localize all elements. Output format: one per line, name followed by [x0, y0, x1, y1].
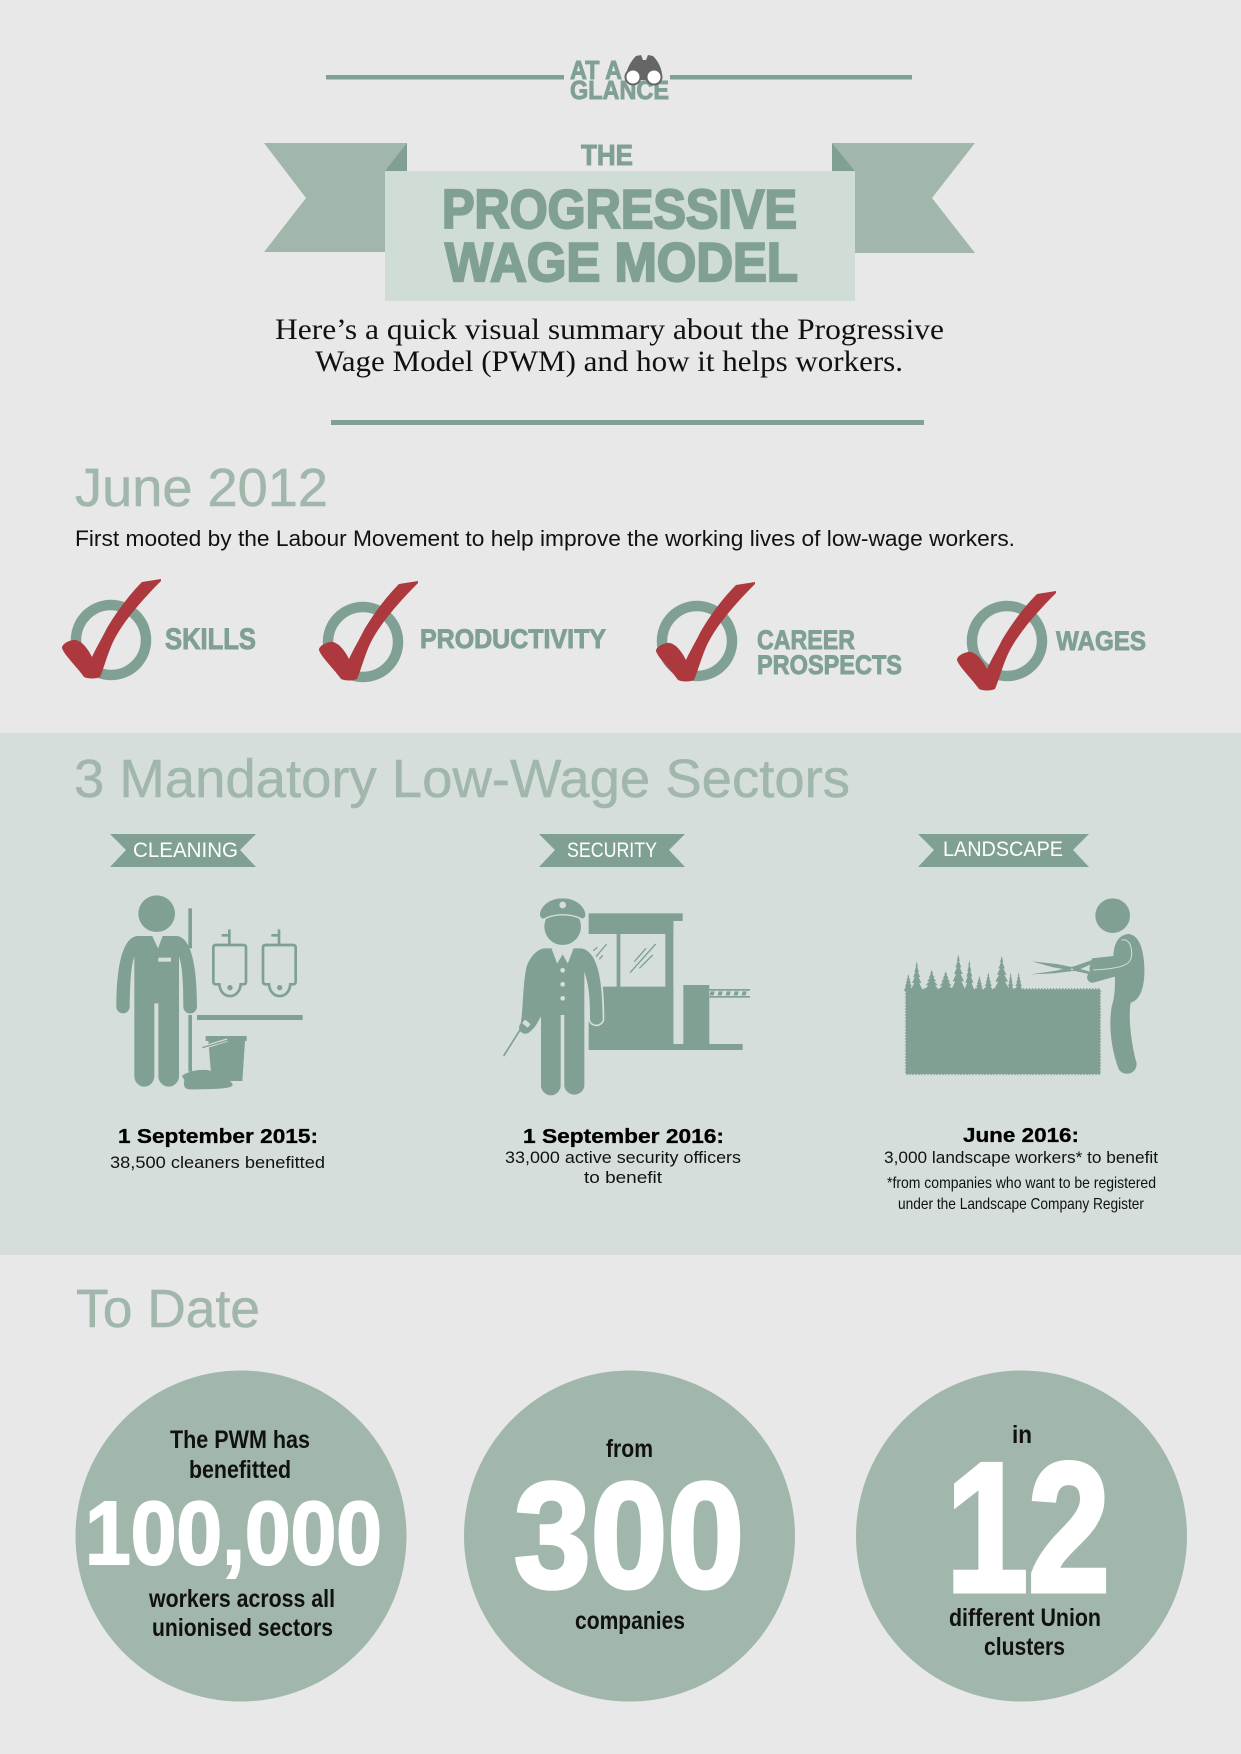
text: landscape: *from companies who want to be registered: [887, 1175, 1156, 1192]
ribbon: cleaning: [110, 834, 256, 867]
stat circle: 100,000 workers: workers across all: [148, 1585, 335, 1613]
heading: 3 mandatory sectors: 3 Mandatory Low-Wage Sectors: [74, 749, 850, 809]
text: security: to benefit: [584, 1168, 662, 1187]
header: at a glance: AT A: [570, 55, 622, 85]
text: security: [505, 1126, 741, 1187]
title ribbon: THE: [581, 140, 633, 172]
text: landscape: June 2016:: [963, 1125, 1079, 1147]
ribbon: landscape: LANDSCAPE: [943, 838, 1063, 861]
item: skills: [62, 579, 256, 678]
header: at a glance: [326, 55, 912, 105]
text: landscape: under the Landscape Company Register: [898, 1196, 1145, 1213]
text: cleaning: 1 September 2015:: [118, 1126, 318, 1148]
title ribbon: PROGRESSIVE: [442, 178, 797, 240]
intro text: Here’s a quick visual summary about the Progressive: [275, 313, 944, 346]
stat circle: 12 union clusters: clusters: [984, 1633, 1065, 1661]
text: security: 33,000 active security officers: [505, 1148, 741, 1167]
text: landscape: [884, 1125, 1158, 1213]
stat circle: 12 union clusters: 12: [946, 1424, 1110, 1630]
icon: binoculars: [626, 55, 662, 84]
title ribbon: WAGE MODEL: [445, 231, 798, 293]
stat circle: 300 companies: from: [606, 1435, 653, 1463]
stat circle: 100,000 workers: 100,000: [85, 1484, 382, 1584]
header: at a glance: GLANCE: [570, 75, 669, 105]
icon: hedge trimmer: [904, 898, 1144, 1074]
stat circle: 100,000 workers: benefitted: [189, 1456, 291, 1484]
heading: to date: To Date: [76, 1279, 260, 1339]
ribbon: security: [539, 834, 685, 867]
stat circle: 12 union clusters: in: [1012, 1421, 1032, 1449]
item: career prospects: CAREER: [757, 625, 855, 655]
ribbon: landscape: [918, 834, 1089, 867]
stat circle: 100,000 workers: [76, 1370, 406, 1702]
text: landscape: 3,000 landscape workers* to benefit: [884, 1148, 1158, 1167]
stat circle: 100,000 workers: unionised sectors: [152, 1614, 333, 1642]
intro text: Wage Model (PWM) and how it helps workers.: [315, 345, 903, 378]
text: cleaning: [110, 1126, 325, 1172]
item: career prospects: [656, 582, 902, 682]
item: career prospects: PROSPECTS: [757, 650, 902, 680]
stat circle: 300 companies: [464, 1370, 795, 1702]
item: productivity: [319, 581, 606, 680]
item: productivity: PRODUCTIVITY: [420, 624, 606, 654]
panel: sectors band: [0, 733, 1241, 1255]
text: cleaning: 38,500 cleaners benefitted: [110, 1153, 325, 1172]
stat circle: 12 union clusters: different Union: [949, 1604, 1101, 1632]
item: wages: [957, 591, 1146, 690]
title ribbon: [264, 140, 975, 301]
text: security: 1 September 2016:: [523, 1126, 724, 1148]
stat circle: 100,000 workers: The PWM has: [170, 1426, 310, 1454]
intro text: [275, 313, 944, 378]
ribbon: security: SECURITY: [567, 839, 657, 862]
stat circle: 12 union clusters: [856, 1370, 1187, 1702]
icon: cleaner: [116, 895, 303, 1089]
heading: June 2012: June 2012: [75, 458, 328, 518]
item: skills: SKILLS: [165, 623, 256, 656]
stat circle: 300 companies: companies: [575, 1607, 685, 1635]
stat circle: 300 companies: 300: [514, 1451, 744, 1619]
icon: security guard: [504, 898, 750, 1095]
text: first mooted: First mooted by the Labour Movement to help improve the working lives of low-wage workers.: [75, 526, 1015, 551]
item: wages: WAGES: [1056, 626, 1146, 656]
ribbon: cleaning: CLEANING: [133, 839, 238, 862]
